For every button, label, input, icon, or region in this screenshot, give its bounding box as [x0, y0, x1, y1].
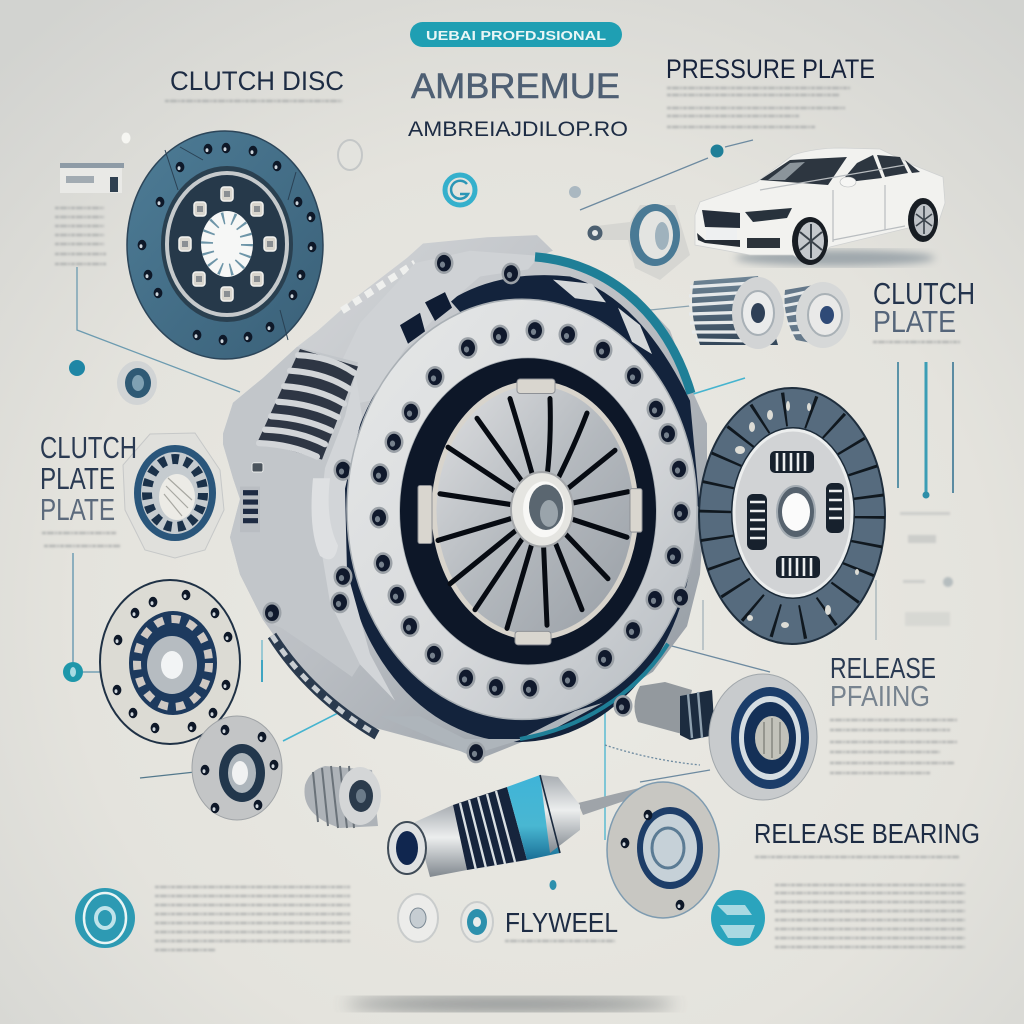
finned cylinders: [689, 276, 850, 349]
teal dot: [550, 880, 556, 890]
teal node: [69, 360, 85, 376]
rim clips: [418, 379, 642, 645]
label: release: [830, 653, 936, 713]
title: AMBREMUE: [411, 67, 620, 106]
gauge dot: [922, 492, 930, 498]
badge: UEBAI PROFDJSIONAL: [426, 28, 606, 43]
label: clutch plate right: [873, 276, 975, 339]
diaphragm fingers: [438, 399, 628, 628]
lower slotted band: [272, 636, 377, 735]
subtitle: AMBREIAJDILOP.RO: [408, 118, 628, 141]
cooling fins: [258, 349, 358, 460]
headlight: [745, 208, 792, 222]
badge: [410, 22, 622, 47]
label: clutch plate right: CLUTCH: [873, 276, 975, 311]
teal dot: [710, 144, 724, 158]
housing: [223, 235, 707, 758]
connector lines: [73, 140, 876, 840]
small gauges near flywheel label: [398, 894, 438, 942]
ribs top-left: [342, 263, 415, 311]
windows: [760, 157, 847, 185]
spring collar: [304, 766, 381, 828]
label: pressure plate: PRESSURE PLATE: [666, 54, 875, 84]
collar: [415, 805, 467, 877]
lower bearing: [192, 716, 282, 820]
small tag: [252, 463, 263, 472]
small bolt left: [117, 361, 157, 405]
icon: right badge: [711, 890, 765, 946]
left flywheel disc: [100, 580, 240, 744]
bracket pockets: [400, 292, 452, 344]
arched lobe: [312, 478, 338, 559]
small probe: [261, 660, 263, 682]
grille: [702, 210, 740, 228]
label: clutch disc: CLUTCH DISC: [170, 66, 344, 96]
label: clutch plate left: PLATE: [40, 492, 115, 527]
rod: [578, 787, 643, 815]
left grey band: [316, 370, 395, 701]
small part top centre: [338, 140, 362, 170]
damper springs: [747, 451, 844, 578]
dark interior upper right: [450, 275, 700, 509]
bracket bearing: [588, 204, 690, 280]
car shadow: [735, 250, 935, 266]
icon: left badge: [75, 888, 135, 948]
vent: [240, 487, 260, 532]
main clutch assembly: [223, 235, 707, 763]
grey pieces upper right: [553, 280, 652, 354]
faint notes right: [900, 512, 953, 626]
dark interior lower: [342, 301, 694, 742]
ring holes: [370, 319, 690, 699]
centre opening: [400, 358, 656, 664]
fasteners: [221, 187, 233, 201]
hydraulic piston: [388, 775, 643, 877]
label: release: RELEASE: [830, 653, 936, 685]
hub: [511, 472, 573, 547]
floor shadow: [345, 997, 675, 1011]
side gauges: [898, 362, 953, 493]
small knob: [569, 186, 581, 198]
label: clutch plate left: [40, 430, 137, 527]
left block: [223, 347, 360, 677]
left plate: [123, 433, 224, 558]
clutch plate right: [699, 388, 885, 644]
label: flywheel: FLYWEEL: [505, 907, 618, 938]
car: [695, 148, 945, 266]
blue sleeve: [507, 775, 560, 860]
release bearing: [634, 674, 817, 800]
icon: G ring: [445, 175, 475, 205]
flywheel disc bottom: [607, 782, 719, 918]
clutch disc: [127, 131, 323, 359]
segment marks: [735, 401, 859, 628]
mirror: [840, 177, 856, 187]
lower grey lugs: [380, 703, 603, 756]
label: release: PFAIING: [830, 681, 930, 713]
bellows: [453, 787, 527, 870]
label: clutch plate right: PLATE: [873, 304, 956, 339]
text blocks (blurred captions): [42, 88, 965, 950]
diaphragm dome: [434, 383, 636, 638]
bolts housing: [434, 252, 454, 274]
teal arc: [535, 257, 691, 393]
upper grey bracket: [335, 251, 540, 406]
wheels: [792, 217, 828, 265]
label: release bearing: RELEASE BEARING: [754, 818, 980, 849]
hub star: [201, 211, 253, 277]
label: clutch plate left: PLATE: [40, 461, 115, 496]
white pin: [122, 132, 130, 144]
caption icon: [60, 163, 124, 193]
label: clutch plate left: CLUTCH: [40, 430, 137, 465]
pressure ring: [347, 299, 697, 719]
teal node lower: [63, 662, 83, 682]
bore: [388, 822, 426, 874]
icon: flywheel ring: [461, 902, 493, 942]
end cap: [540, 775, 580, 853]
